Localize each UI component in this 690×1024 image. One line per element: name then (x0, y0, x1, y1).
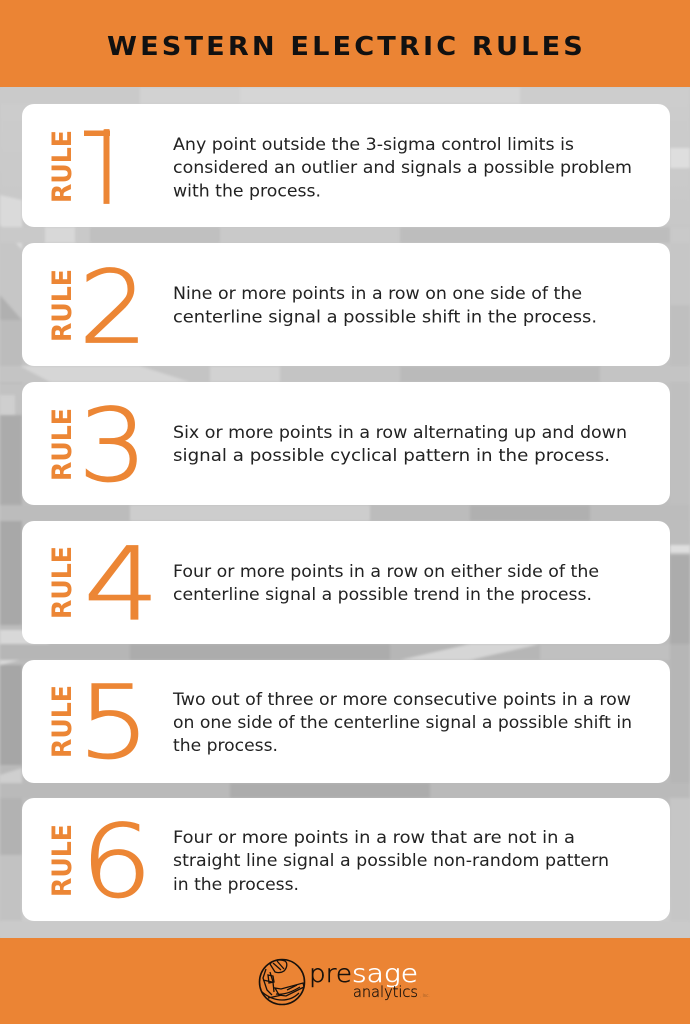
rule 4 description (173, 562, 599, 604)
rule 4 description: centerline signal a possible trend in the process. (173, 585, 592, 604)
rule 6 description (173, 828, 609, 894)
label: RULE vertical: RULE (47, 546, 78, 619)
logo wordmark: sage (352, 959, 418, 988)
rule number 6: 6 (81, 804, 152, 920)
rule number 4: 4 (84, 526, 159, 643)
rule 1 description: Any point outside the 3-sigma control limits is (173, 135, 574, 154)
panel: rule 3 (22, 382, 670, 505)
logo wordmark: analytics (353, 983, 418, 1001)
panel: rule 4 (22, 521, 670, 644)
rule 4 description: Four or more points in a row on either side of the (173, 562, 599, 581)
icon: presage logo emblem (260, 960, 304, 1004)
rule number 1 (84, 129, 110, 204)
rule 3 description: Six or more points in a row alternating up and down (173, 423, 627, 442)
rule 2 description: Nine or more points in a row on one side of the (173, 284, 582, 303)
logo wordmark: , Inc. (420, 993, 430, 998)
logo wordmark (309, 959, 430, 1001)
panel: rule 2 (22, 243, 670, 366)
rule 1 description (173, 135, 632, 200)
rule 6 description: Four or more points in a row that are not in a (173, 828, 575, 847)
header band (0, 0, 690, 87)
rule 5 description: the process. (173, 736, 278, 755)
rule 5 description (172, 690, 632, 755)
rule 1 description: considered an outlier and signals a possible problem (173, 158, 632, 177)
label: RULE vertical: RULE (47, 824, 78, 897)
rule 3 description: signal a possible cyclical pattern in the process. (173, 446, 610, 465)
rule number 3: 3 (78, 387, 147, 504)
label: RULE vertical: RULE (47, 269, 78, 342)
rule 2 description: centerline signal a possible shift in the process. (173, 308, 597, 326)
title: WESTERN ELECTRIC RULES (107, 32, 586, 62)
label: RULE vertical: RULE (47, 130, 78, 203)
panel: rule 5 (22, 660, 670, 783)
panel: rule 1 (22, 104, 670, 227)
rule 1 description: with the process. (173, 182, 321, 200)
rule 6 description: straight line signal a possible non-random pattern (173, 851, 609, 870)
rule number 2: 2 (79, 249, 148, 366)
rule 6 description: in the process. (173, 875, 299, 894)
panel: rule 6 (22, 798, 670, 921)
rule 3 description (173, 423, 627, 465)
footer band (0, 938, 690, 1024)
rule 2 description (173, 284, 597, 326)
label: RULE vertical: RULE (47, 408, 78, 481)
rule number 5: 5 (78, 665, 150, 781)
rule 5 description: on one side of the centerline signal a possible shift in (173, 713, 632, 732)
logo wordmark: pre (309, 959, 352, 988)
rule number 1: 1 (74, 110, 138, 227)
rule 5 description: Two out of three or more consecutive points in a row (172, 690, 631, 709)
label: RULE vertical: RULE (47, 685, 78, 758)
